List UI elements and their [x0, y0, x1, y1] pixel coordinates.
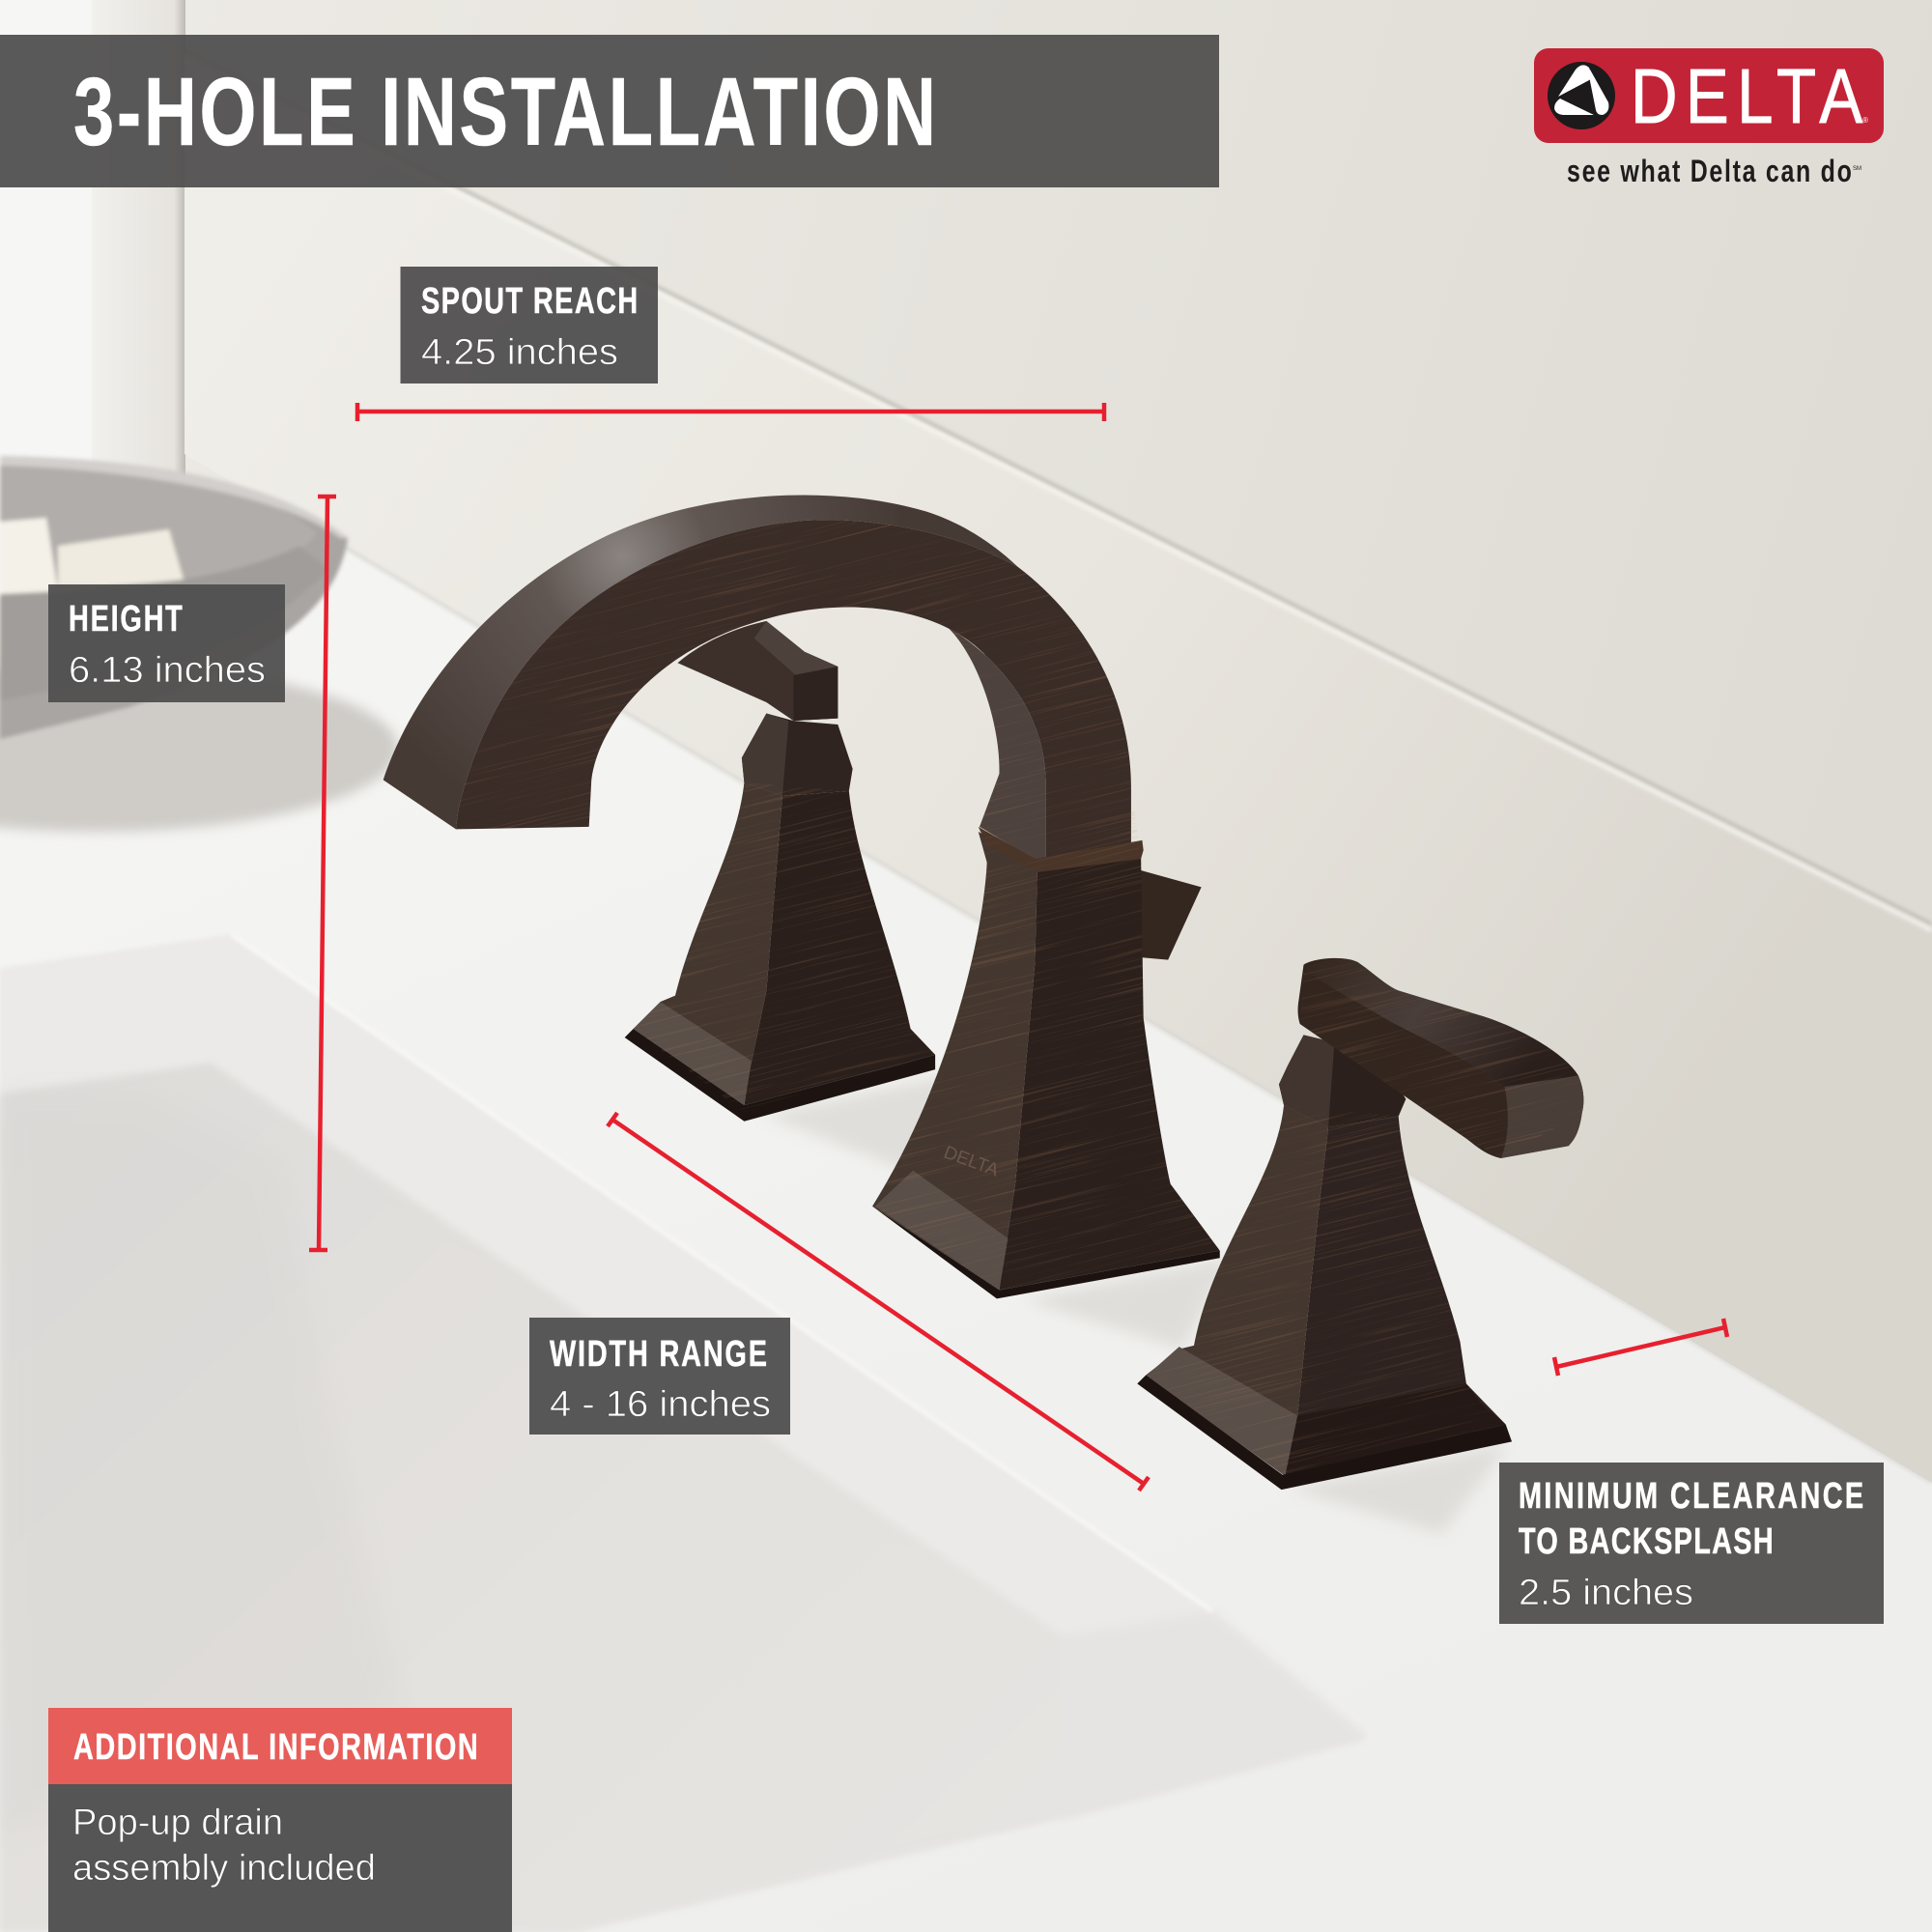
center spout body: DELTA: [941, 1143, 1002, 1181]
dimension line: clearance: [1554, 1319, 1727, 1376]
callout: spout reach: SPOUT REACH: [421, 280, 638, 322]
Delta logo: [1534, 48, 1884, 189]
callout: spout reach: [400, 267, 658, 384]
callout: width range: [529, 1318, 790, 1435]
dimension line: spout reach: [357, 403, 1104, 421]
Delta logo: SM: [1853, 166, 1861, 172]
callout: minimum clearance: [1499, 1463, 1884, 1624]
callout: height: HEIGHT: [69, 598, 183, 639]
panel: additional information: Pop-up drain: [72, 1803, 283, 1843]
dimension line: height: [309, 497, 336, 1250]
center spout arch: [384, 495, 1131, 862]
callout: minimum clearance: TO BACKSPLASH: [1519, 1520, 1774, 1562]
callout: height: [48, 584, 285, 702]
title banner: 3-HOLE INSTALLATION: [73, 58, 936, 165]
panel: additional information: ADDITIONAL INFORMATION: [73, 1726, 478, 1768]
callout: height: 6.13 inches: [69, 650, 266, 691]
callout: width range: WIDTH RANGE: [550, 1333, 767, 1375]
title banner: [0, 35, 1219, 187]
diverter side lever: [1135, 868, 1202, 960]
soap dish bowl: [0, 456, 348, 739]
faucet set: spout and two lever handles: [321, 495, 1723, 1532]
callout: minimum clearance: 2.5 inches: [1519, 1573, 1693, 1613]
left back handle: [625, 621, 935, 1122]
right handle: [1137, 958, 1583, 1490]
panel: additional information: assembly included: [72, 1848, 376, 1889]
panel: additional information: [48, 1708, 512, 1932]
Delta logo: ®: [1862, 116, 1868, 125]
dimension line: width range: [608, 1113, 1149, 1491]
center spout body: [872, 827, 1220, 1298]
brushed bronze texture: [460, 521, 1582, 1474]
Delta logo: DELTA: [1631, 52, 1863, 139]
callout: spout reach: 4.25 inches: [421, 332, 618, 373]
callout: minimum clearance: MINIMUM CLEARANCE: [1519, 1475, 1863, 1517]
Delta logo: see what Delta can do: [1567, 155, 1852, 189]
callout: width range: 4 - 16 inches: [550, 1384, 771, 1425]
